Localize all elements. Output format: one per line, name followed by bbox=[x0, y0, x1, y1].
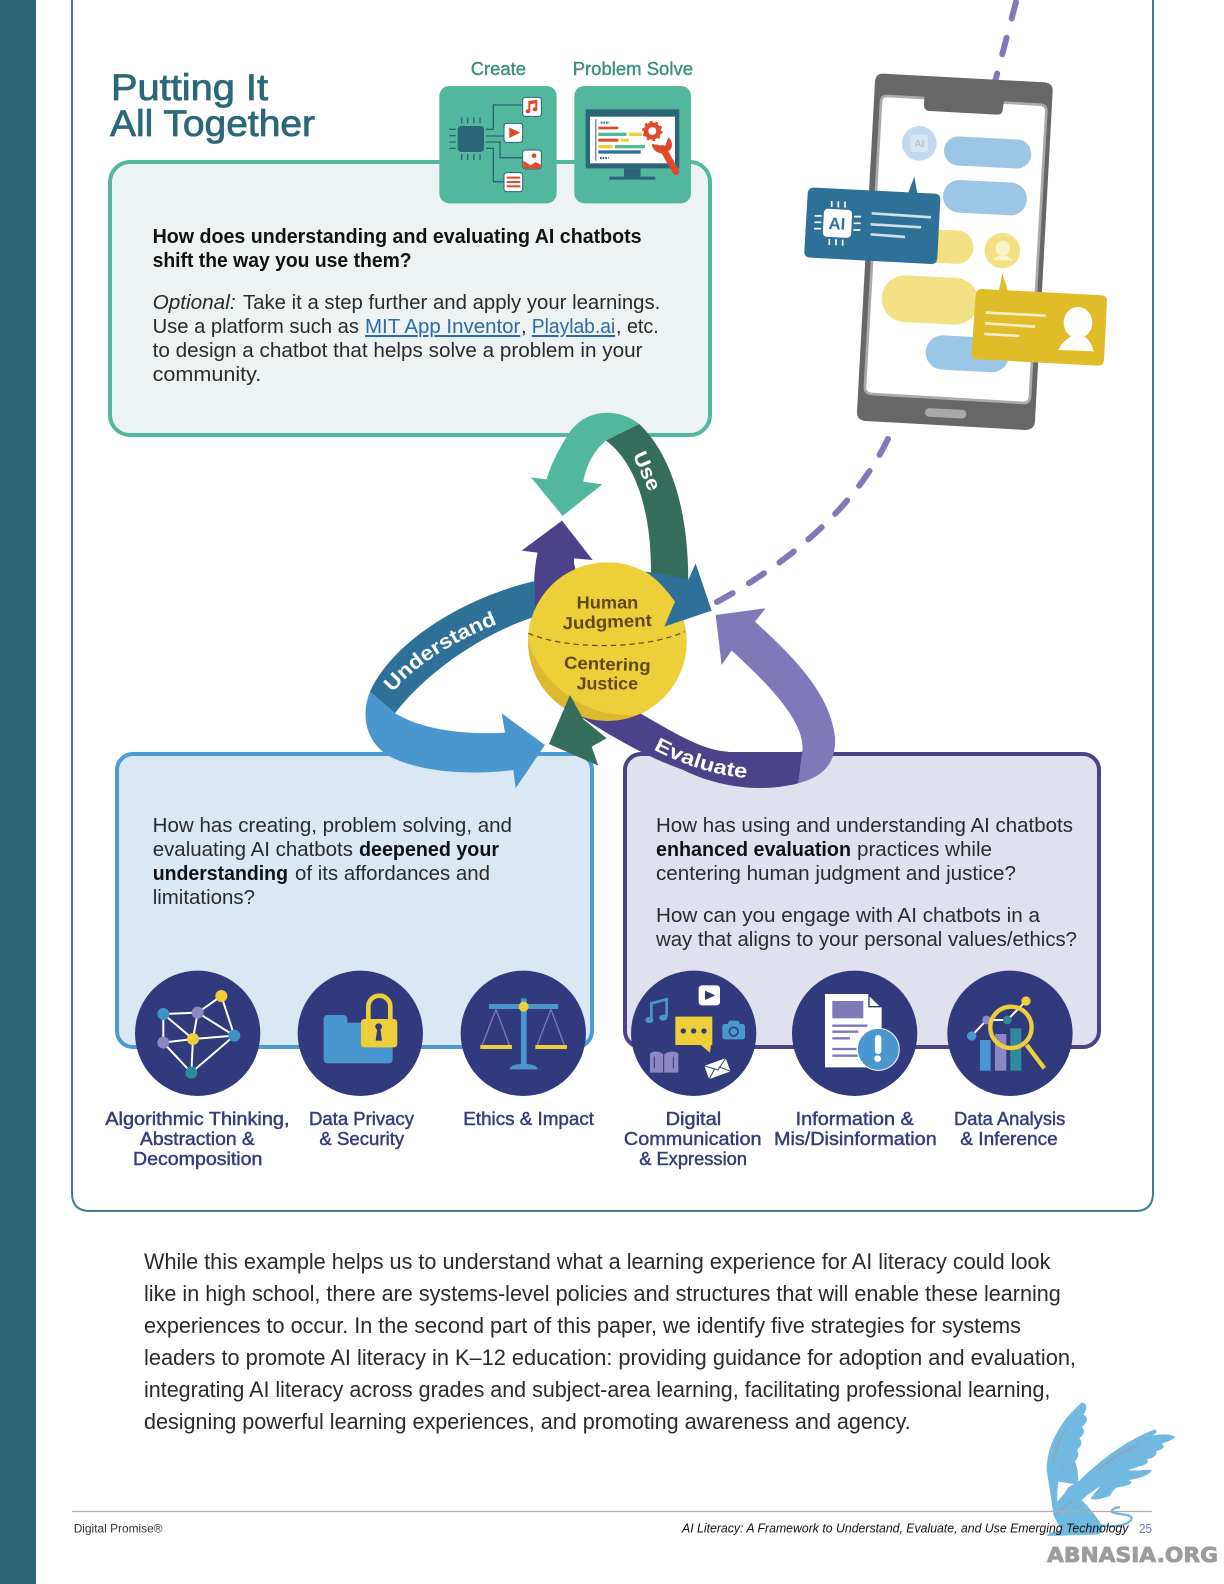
caption: data privacy bbox=[309, 1108, 415, 1149]
icon: problem solve tile bbox=[574, 86, 691, 203]
caption: digital communication: Communication bbox=[624, 1128, 762, 1149]
body paragraph: integrating AI literacy across grades and subject-area learning, facilitating professional learning, bbox=[144, 1377, 1050, 1402]
body paragraph: like in high school, there are systems-level policies and structures that will enable these learning bbox=[144, 1281, 1061, 1306]
center sphere: human judgment, centering justice: Judgment bbox=[562, 610, 652, 633]
reflection question: How does understanding and evaluating AI chatbots bbox=[153, 226, 642, 248]
understand question text: deepened your bbox=[359, 838, 499, 861]
center sphere: human judgment, centering justice: Justice bbox=[577, 674, 638, 694]
icon: data analysis bbox=[947, 971, 1073, 1096]
watermark: griffin logo bbox=[1047, 1402, 1175, 1536]
center sphere: human judgment, centering justice: Human bbox=[577, 592, 638, 612]
footer rule bbox=[72, 1510, 1152, 1512]
panel: understand reflection bbox=[117, 754, 592, 1047]
evaluate question text: How has using and understanding AI chatbots bbox=[656, 814, 1073, 837]
understand question text bbox=[153, 814, 512, 909]
icon: ethics and impact bbox=[461, 971, 586, 1096]
outer frame bbox=[72, 0, 1153, 1211]
caption: data analysis: & Inference bbox=[960, 1128, 1058, 1149]
label: problem solve: Problem Solve bbox=[573, 58, 693, 79]
footer left: publisher: Digital Promise® bbox=[74, 1522, 163, 1536]
understand question text: understanding bbox=[153, 862, 288, 885]
illustration: phone with chat: AI bbox=[914, 139, 925, 150]
icon: information and misinformation bbox=[792, 971, 917, 1096]
arrow: understand: Understand bbox=[383, 610, 496, 690]
arrowhead: evaluate into understand bbox=[549, 695, 607, 766]
arrow: use bbox=[531, 413, 688, 582]
left sidebar bbox=[0, 0, 36, 1584]
understand question text: evaluating AI chatbots bbox=[153, 838, 353, 861]
optional extension text bbox=[153, 291, 660, 386]
understand question text: How has creating, problem solving, and bbox=[153, 814, 512, 837]
panel: use reflection bbox=[110, 162, 710, 435]
body paragraph: While this example helps us to understand what a learning experience for AI literacy could look bbox=[144, 1249, 1051, 1274]
body paragraph: designing powerful learning experiences, and promoting awareness and agency. bbox=[144, 1409, 911, 1434]
callout: human message bbox=[972, 273, 1107, 366]
arrow: evaluate bbox=[582, 608, 836, 788]
evaluate question text bbox=[655, 814, 1077, 951]
title: All Together bbox=[110, 103, 315, 144]
evaluate question text: practices while bbox=[857, 838, 992, 861]
icon: digital communication bbox=[631, 971, 756, 1096]
optional extension text: , etc. bbox=[616, 315, 659, 338]
caption: information: Information & bbox=[796, 1108, 915, 1129]
diagram: use understand evaluate cycle bbox=[366, 412, 836, 788]
dashed connector line bbox=[717, 2, 1016, 602]
reflection question: shift the way you use them? bbox=[153, 250, 412, 272]
caption: data privacy: Data Privacy bbox=[309, 1108, 415, 1129]
caption: digital communication: Digital bbox=[666, 1108, 721, 1129]
optional extension text: Use a platform such as bbox=[153, 315, 359, 338]
panel: evaluate reflection bbox=[625, 754, 1099, 1047]
reflection question bbox=[153, 226, 642, 272]
center sphere: human judgment, centering justice bbox=[528, 562, 687, 721]
caption: algorithmic thinking bbox=[105, 1108, 290, 1169]
icon: create tile bbox=[439, 86, 557, 203]
optional extension text: Optional: bbox=[153, 291, 236, 314]
page number: 25 bbox=[1139, 1521, 1152, 1536]
icon: data privacy bbox=[298, 971, 423, 1096]
caption: data analysis bbox=[954, 1108, 1065, 1149]
caption: algorithmic thinking: Abstraction & bbox=[140, 1128, 255, 1149]
evaluate question text: way that aligns to your personal values/ethics? bbox=[655, 928, 1077, 951]
understand question text: of its affordances and bbox=[295, 862, 490, 885]
optional extension text: to design a chatbot that helps solve a problem in your bbox=[153, 339, 643, 362]
caption: ethics: Ethics & Impact bbox=[463, 1108, 594, 1129]
title: Putting It bbox=[111, 67, 269, 108]
optional extension text: Take it a step further and apply your learnings. bbox=[243, 291, 660, 314]
optional extension text: MIT App Inventor bbox=[365, 315, 520, 338]
callout: AI message bbox=[804, 177, 940, 264]
arrow: purple up head bbox=[522, 521, 593, 613]
title bbox=[110, 67, 315, 144]
caption: algorithmic thinking: Algorithmic Thinking, bbox=[105, 1108, 290, 1129]
optional extension text: Playlab.ai bbox=[532, 315, 615, 338]
understand question text: limitations? bbox=[153, 886, 255, 909]
optional extension text: , bbox=[521, 315, 527, 338]
center sphere: human judgment, centering justice: Centering bbox=[564, 652, 651, 675]
watermark text: ABNASIA.ORG bbox=[1047, 1543, 1218, 1567]
arrowhead: use into evaluate bbox=[645, 563, 712, 627]
illustration: phone with chat bbox=[804, 74, 1107, 430]
caption: data privacy: & Security bbox=[319, 1128, 405, 1149]
body paragraph: leaders to promote AI literacy in K–12 education: providing guidance for adoption and evaluation, bbox=[144, 1345, 1076, 1370]
caption: digital communication: & Expression bbox=[639, 1148, 747, 1169]
footer right: document title: AI Literacy: A Framework to Understand, Evaluate, and Use Emerging Technology bbox=[681, 1522, 1129, 1536]
caption: data analysis: Data Analysis bbox=[954, 1108, 1065, 1129]
label: create: Create bbox=[471, 58, 526, 79]
caption: algorithmic thinking: Decomposition bbox=[133, 1148, 262, 1169]
arrow: understand bbox=[366, 581, 545, 788]
arrow: evaluate: Evaluate bbox=[654, 738, 746, 778]
callout: AI message: AI bbox=[828, 214, 846, 234]
caption: information bbox=[774, 1108, 937, 1149]
caption: digital communication bbox=[624, 1108, 762, 1169]
body paragraph: experiences to occur. In the second part of this paper, we identify five strategies for systems bbox=[144, 1313, 1021, 1338]
evaluate question text: How can you engage with AI chatbots in a bbox=[656, 904, 1041, 927]
icon: algorithmic thinking bbox=[135, 971, 260, 1096]
evaluate question text: centering human judgment and justice? bbox=[656, 862, 1016, 885]
evaluate question text: enhanced evaluation bbox=[656, 838, 851, 861]
body paragraph bbox=[144, 1249, 1076, 1434]
optional extension text: community. bbox=[153, 363, 261, 386]
caption: information: Mis/Disinformation bbox=[774, 1128, 937, 1149]
arrow: use: Use bbox=[628, 448, 665, 494]
